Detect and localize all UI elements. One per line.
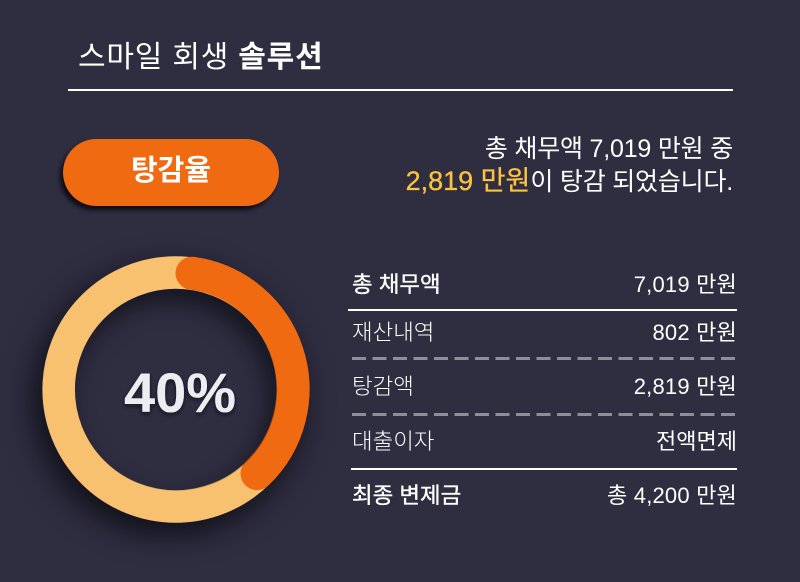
badge: reduction rate — [63, 139, 279, 206]
title underline — [68, 89, 733, 91]
summary text: 총 채무액 7,019 만원 중 — [485, 135, 733, 163]
title: 스마일 회생 솔루션 — [78, 41, 323, 74]
row: loan interest: 전액면제 — [656, 429, 737, 454]
row: total debt — [352, 272, 737, 297]
summary text: 2,819 만원이 탕감 되었습니다. — [406, 166, 733, 196]
row: reduction amount: 2,819 만원 — [634, 374, 737, 399]
donut value: 40% — [124, 361, 236, 424]
badge: reduction rate: 탕감율 — [131, 155, 211, 187]
donut track — [59, 272, 293, 506]
row: total debt: 7,019 만원 — [634, 272, 737, 297]
row: reduction amount — [352, 374, 737, 399]
donut chart — [24, 256, 314, 546]
row: assets — [352, 320, 737, 345]
row: final repayment: 총 4,200 만원 — [607, 483, 737, 508]
row: reduction amount: 탕감액 — [352, 374, 414, 399]
summary text — [406, 135, 733, 196]
donut 40% arc — [192, 273, 293, 474]
row: loan interest — [352, 429, 737, 454]
row: final repayment: 최종 변제금 — [352, 483, 461, 508]
row: assets: 재산내역 — [352, 320, 434, 345]
row: assets: 802 만원 — [652, 320, 737, 345]
row: final repayment — [352, 483, 737, 508]
row: total debt: 총 채무액 — [352, 272, 441, 297]
row: loan interest: 대출이자 — [352, 429, 434, 454]
